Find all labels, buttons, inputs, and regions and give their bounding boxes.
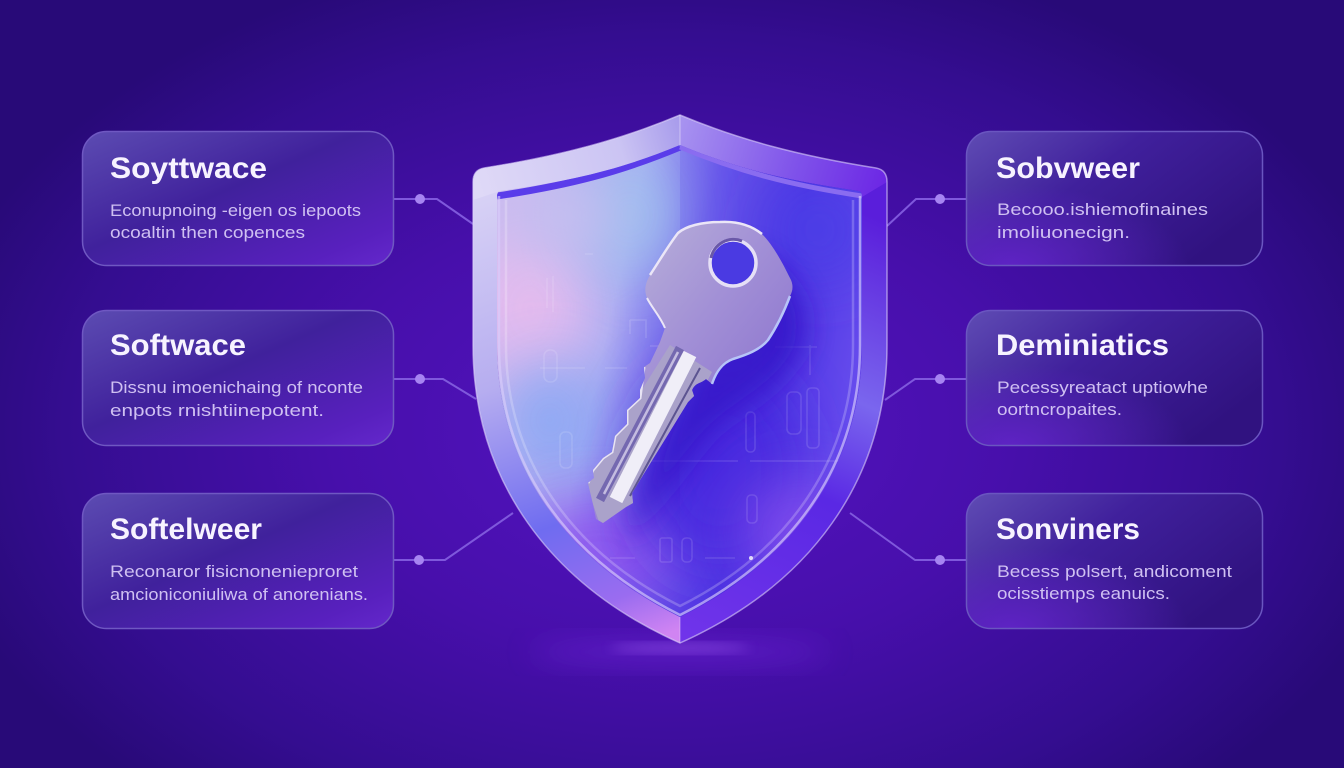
panel: top left [82,132,394,266]
connector: bottom right [850,513,966,565]
text block: top left: Econupnoing -eigen os iepoots [110,201,361,220]
key blade highlight [616,354,690,500]
key teeth highlight [588,367,644,483]
icon: key [588,220,792,523]
top inner band [497,147,680,196]
heading: middle right: Deminiatics [996,329,1169,362]
connector: bottom left [394,513,513,565]
text block: middle left: Dissnu imoenichaing of nconte [110,378,363,397]
heading: bottom right: Sonviners [996,513,1140,546]
heading: bottom left: Softelweer [110,513,262,546]
key hole ring [710,240,756,286]
icon: shield [470,115,887,643]
shield rim: right half [680,115,887,643]
text block: bottom left: amcioniconiuliwa of anorenians. [110,585,368,604]
connector: top right [887,194,966,226]
text block: bottom left: Reconaror fisicnonenieproret [110,562,358,581]
inner rim side lines [499,196,860,615]
heading: top right: Sobvweer [996,152,1140,185]
text block: bottom right: Becess polsert, andicoment [997,562,1232,581]
shield rim: left half [473,115,680,643]
shield rim: outer edge highlight [473,115,887,643]
shield rim: right top [680,115,887,197]
panel: middle right [966,310,1262,446]
faint circuit marks [540,254,855,562]
text block: top right: imoliuonecign. [997,223,1130,242]
key cast shadow [625,250,806,545]
key silhouette [588,223,792,523]
text block: middle right: oortncropaites. [997,400,1122,419]
panel: bottom left [82,494,394,628]
floor glow under shield [530,640,830,664]
connector: top left [394,194,473,224]
connector: middle left [394,374,476,399]
shield rim: left top highlight [473,115,680,200]
key blade edge line [630,368,700,496]
connector: middle right [885,374,966,400]
right half veil [680,145,712,230]
panel: middle left [82,310,394,446]
heading: middle left: Softwace [110,329,246,362]
key blade base [585,345,712,525]
heading: top left: Soyttwace [110,152,267,185]
text block: top left: ocoaltin then copences [110,223,305,242]
shield centre seam [679,115,681,145]
panel: top right [966,132,1262,266]
key blade groove [600,348,680,500]
text block: bottom right: ocisstiemps eanuics. [997,584,1170,603]
panel: bottom right [966,494,1262,628]
text block: middle left: enpots rnishtiinepotent. [110,401,324,420]
shield glass face [497,145,862,617]
key head edge highlight [650,222,762,275]
text block: top right: Becooo.ishiemofinaines [997,200,1208,219]
text block: middle right: Pecessyreatact uptiowhe [997,378,1208,397]
soft colour patches [470,230,590,390]
